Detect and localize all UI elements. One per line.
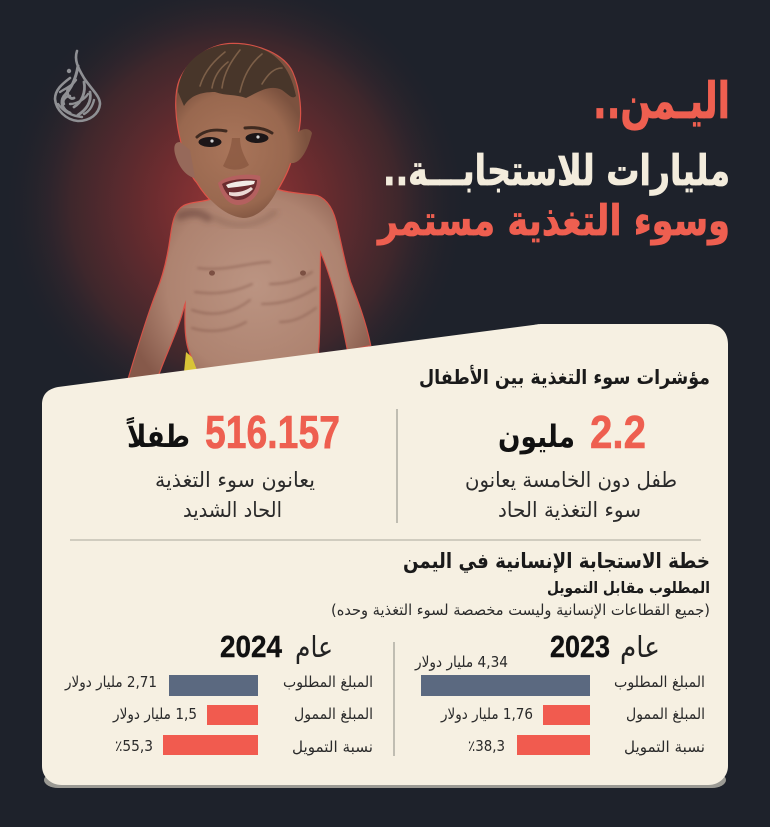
child: red rim glow xyxy=(129,44,370,378)
child: yellow shorts xyxy=(184,352,204,372)
red glow behind child xyxy=(0,0,470,420)
bar required xyxy=(421,675,590,696)
value required: 4,34 مليار دولار xyxy=(414,653,508,671)
child: torso and arms xyxy=(129,190,370,378)
value percentage: ٪55,3 xyxy=(115,737,153,755)
child: brows and eyes xyxy=(197,128,272,147)
stat: 516.157 children xyxy=(126,406,340,522)
value required: 2,71 مليار دولار xyxy=(64,673,157,691)
bar funded xyxy=(543,705,590,725)
child: ribs xyxy=(192,262,316,331)
child: nipples xyxy=(209,270,306,276)
chart: 2024 funding xyxy=(64,629,373,756)
stat: 2.2 million xyxy=(465,406,677,522)
value funded: 1,76 مليار دولار xyxy=(440,705,533,723)
value funded: 1,5 مليار دولار xyxy=(112,705,197,723)
panel: bottom shadow edge xyxy=(44,772,726,788)
row label funded: المبلغ الممول xyxy=(626,705,705,723)
description line 2: سوء التغذية الحاد xyxy=(498,498,641,522)
child: hair xyxy=(178,44,296,106)
number 2.2: 2.2 xyxy=(590,406,646,458)
number 516.157: 516.157 xyxy=(205,406,340,458)
child: head xyxy=(176,44,312,218)
word year: عام xyxy=(295,630,333,664)
description line 1: طفل دون الخامسة يعانون xyxy=(465,468,677,492)
description line 2: الحاد الشديد xyxy=(183,498,282,522)
year 2023: 2023 xyxy=(550,629,610,664)
row label funded: المبلغ الممول xyxy=(294,705,373,723)
heading: response plan: خطة الاستجابة الإنسانية في اليمن xyxy=(403,549,710,573)
word year: عام xyxy=(620,630,660,664)
row label required: المبلغ المطلوب xyxy=(283,673,373,691)
word million: مليون xyxy=(498,419,575,455)
word children: طفلاً xyxy=(126,416,190,455)
logo: Al Jazeera emblem xyxy=(55,51,100,121)
heading: malnutrition indicators: مؤشرات سوء التغذية بين الأطفال xyxy=(419,364,710,389)
bar required xyxy=(169,675,258,696)
value percentage: ٪38,3 xyxy=(468,737,505,755)
child: left ear xyxy=(174,142,195,178)
heading: title xyxy=(376,72,730,246)
child: body shading xyxy=(180,212,275,225)
panel: cream card xyxy=(42,324,728,785)
child: mouth xyxy=(218,175,261,205)
row label percentage: نسبة التمويل xyxy=(624,738,705,756)
subheading: required vs funded: المطلوب مقابل التمويل xyxy=(547,578,710,597)
chart: 2023 funding xyxy=(414,629,705,756)
row label percentage: نسبة التمويل xyxy=(292,738,373,756)
description line 1: يعانون سوء التغذية xyxy=(155,468,315,492)
bar percentage xyxy=(517,735,590,755)
year 2024: 2024 xyxy=(220,629,283,664)
bar funded xyxy=(207,705,258,725)
child: nose xyxy=(223,138,249,170)
note: all humanitarian sectors: (جميع القطاعات الإنسانية وليست مخصصة لسوء التغذية وحده) xyxy=(331,601,710,619)
child photo illustration xyxy=(129,44,370,378)
bar percentage xyxy=(163,735,258,755)
row label required: المبلغ المطلوب xyxy=(614,673,705,691)
